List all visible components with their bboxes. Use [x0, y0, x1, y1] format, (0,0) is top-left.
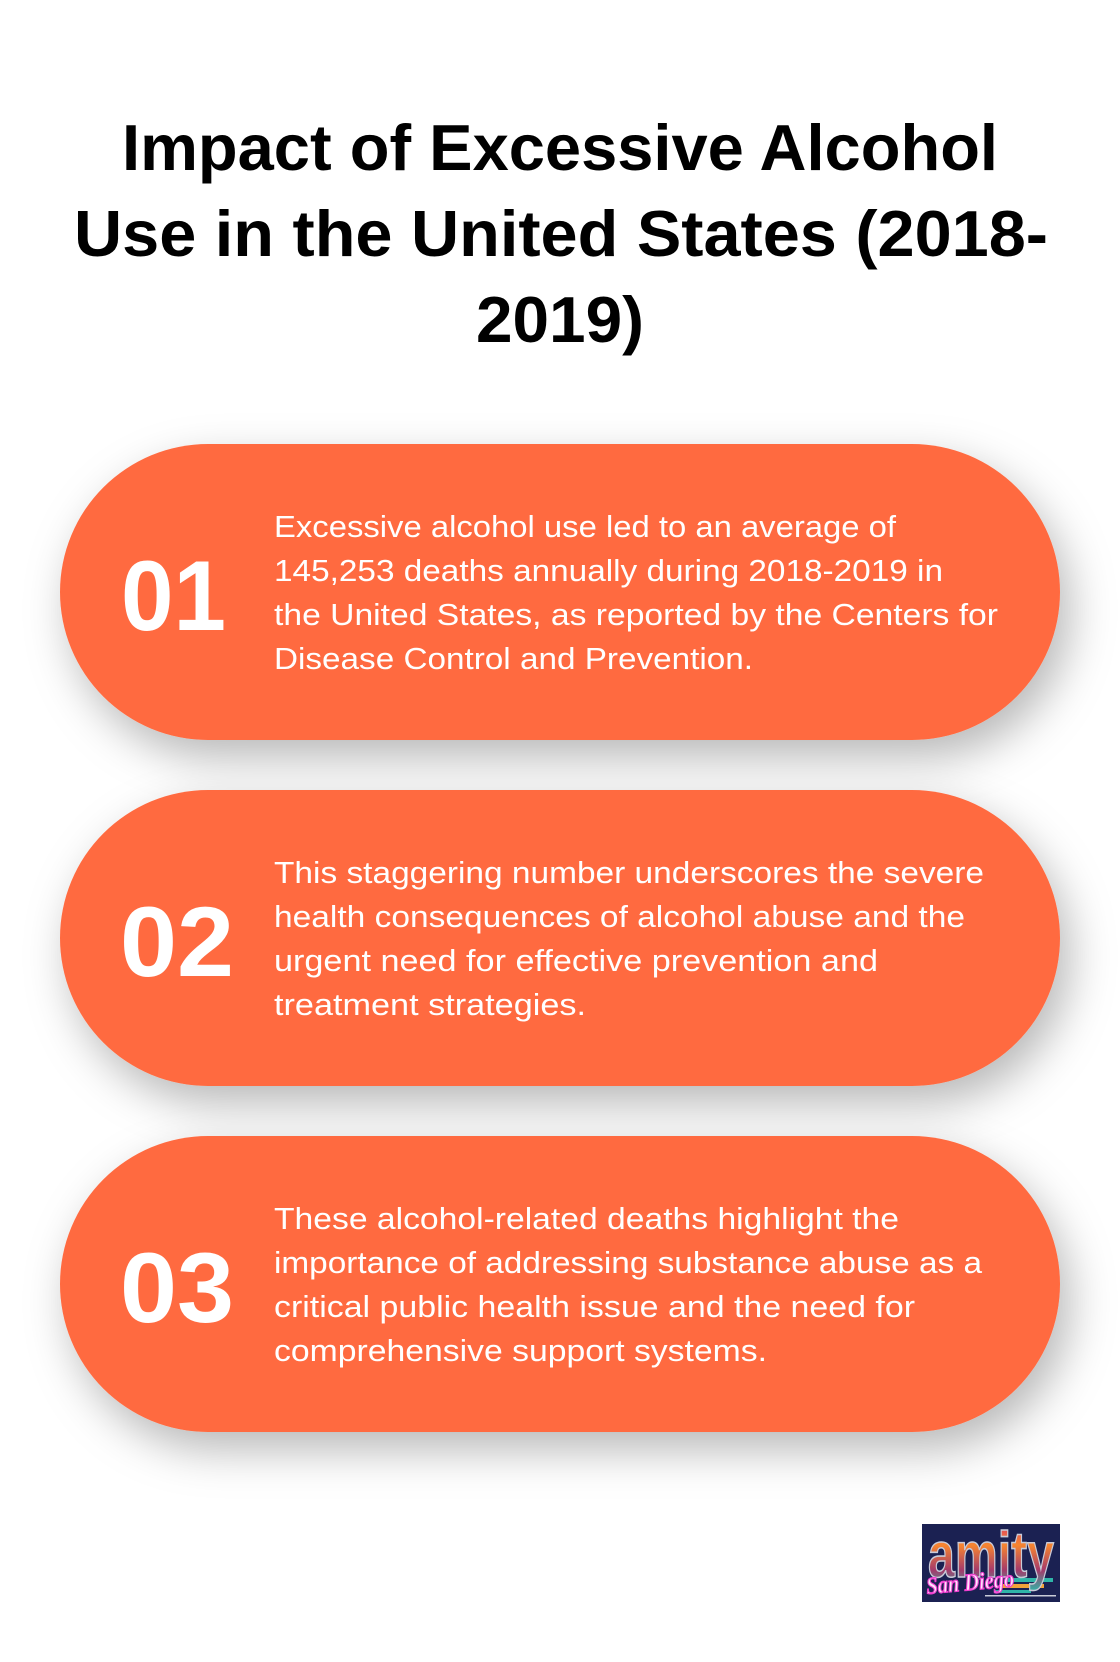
- title: Impact of Excessive Alcohol: [122, 111, 998, 184]
- number 02: 02: [120, 886, 234, 997]
- text block: card 01: Disease Control and Prevention.: [274, 641, 753, 676]
- text block: card 03: critical public health issue and the need for: [274, 1289, 915, 1324]
- text block: card 02: This staggering number underscores the severe: [274, 855, 984, 890]
- number 01: 01: [121, 540, 226, 651]
- title: Use in the United States (2018-: [74, 197, 1048, 270]
- text block: card 03: [274, 1201, 983, 1368]
- text block: card 02: [274, 855, 984, 1022]
- title: 2019): [476, 283, 644, 356]
- panel: card 03: [60, 1136, 1060, 1432]
- text block: card 02: urgent need for effective prevention and: [274, 943, 878, 978]
- number 03: 03: [120, 1232, 234, 1343]
- text block: card 03: importance of addressing substance abuse as a: [274, 1245, 983, 1280]
- panel: card 01: [60, 444, 1060, 740]
- title: [74, 111, 1048, 356]
- text block: card 01: 145,253 deaths annually during 2018-2019 in: [274, 553, 943, 588]
- text block: card 03: These alcohol-related deaths highlight the: [274, 1201, 899, 1236]
- text block: card 02: health consequences of alcohol abuse and the: [274, 899, 965, 934]
- text block: card 01: [274, 509, 998, 676]
- panel: card 02: [60, 790, 1060, 1086]
- logo: Amity San Diego: amity: [928, 1520, 1054, 1592]
- logo: Amity San Diego: San Diego: [925, 1566, 1015, 1600]
- text block: card 01: the United States, as reported by the Centers for: [274, 597, 998, 632]
- text block: card 03: comprehensive support systems.: [274, 1333, 767, 1368]
- text block: card 02: treatment strategies.: [274, 987, 586, 1022]
- text block: card 01: Excessive alcohol use led to an average of: [274, 509, 896, 544]
